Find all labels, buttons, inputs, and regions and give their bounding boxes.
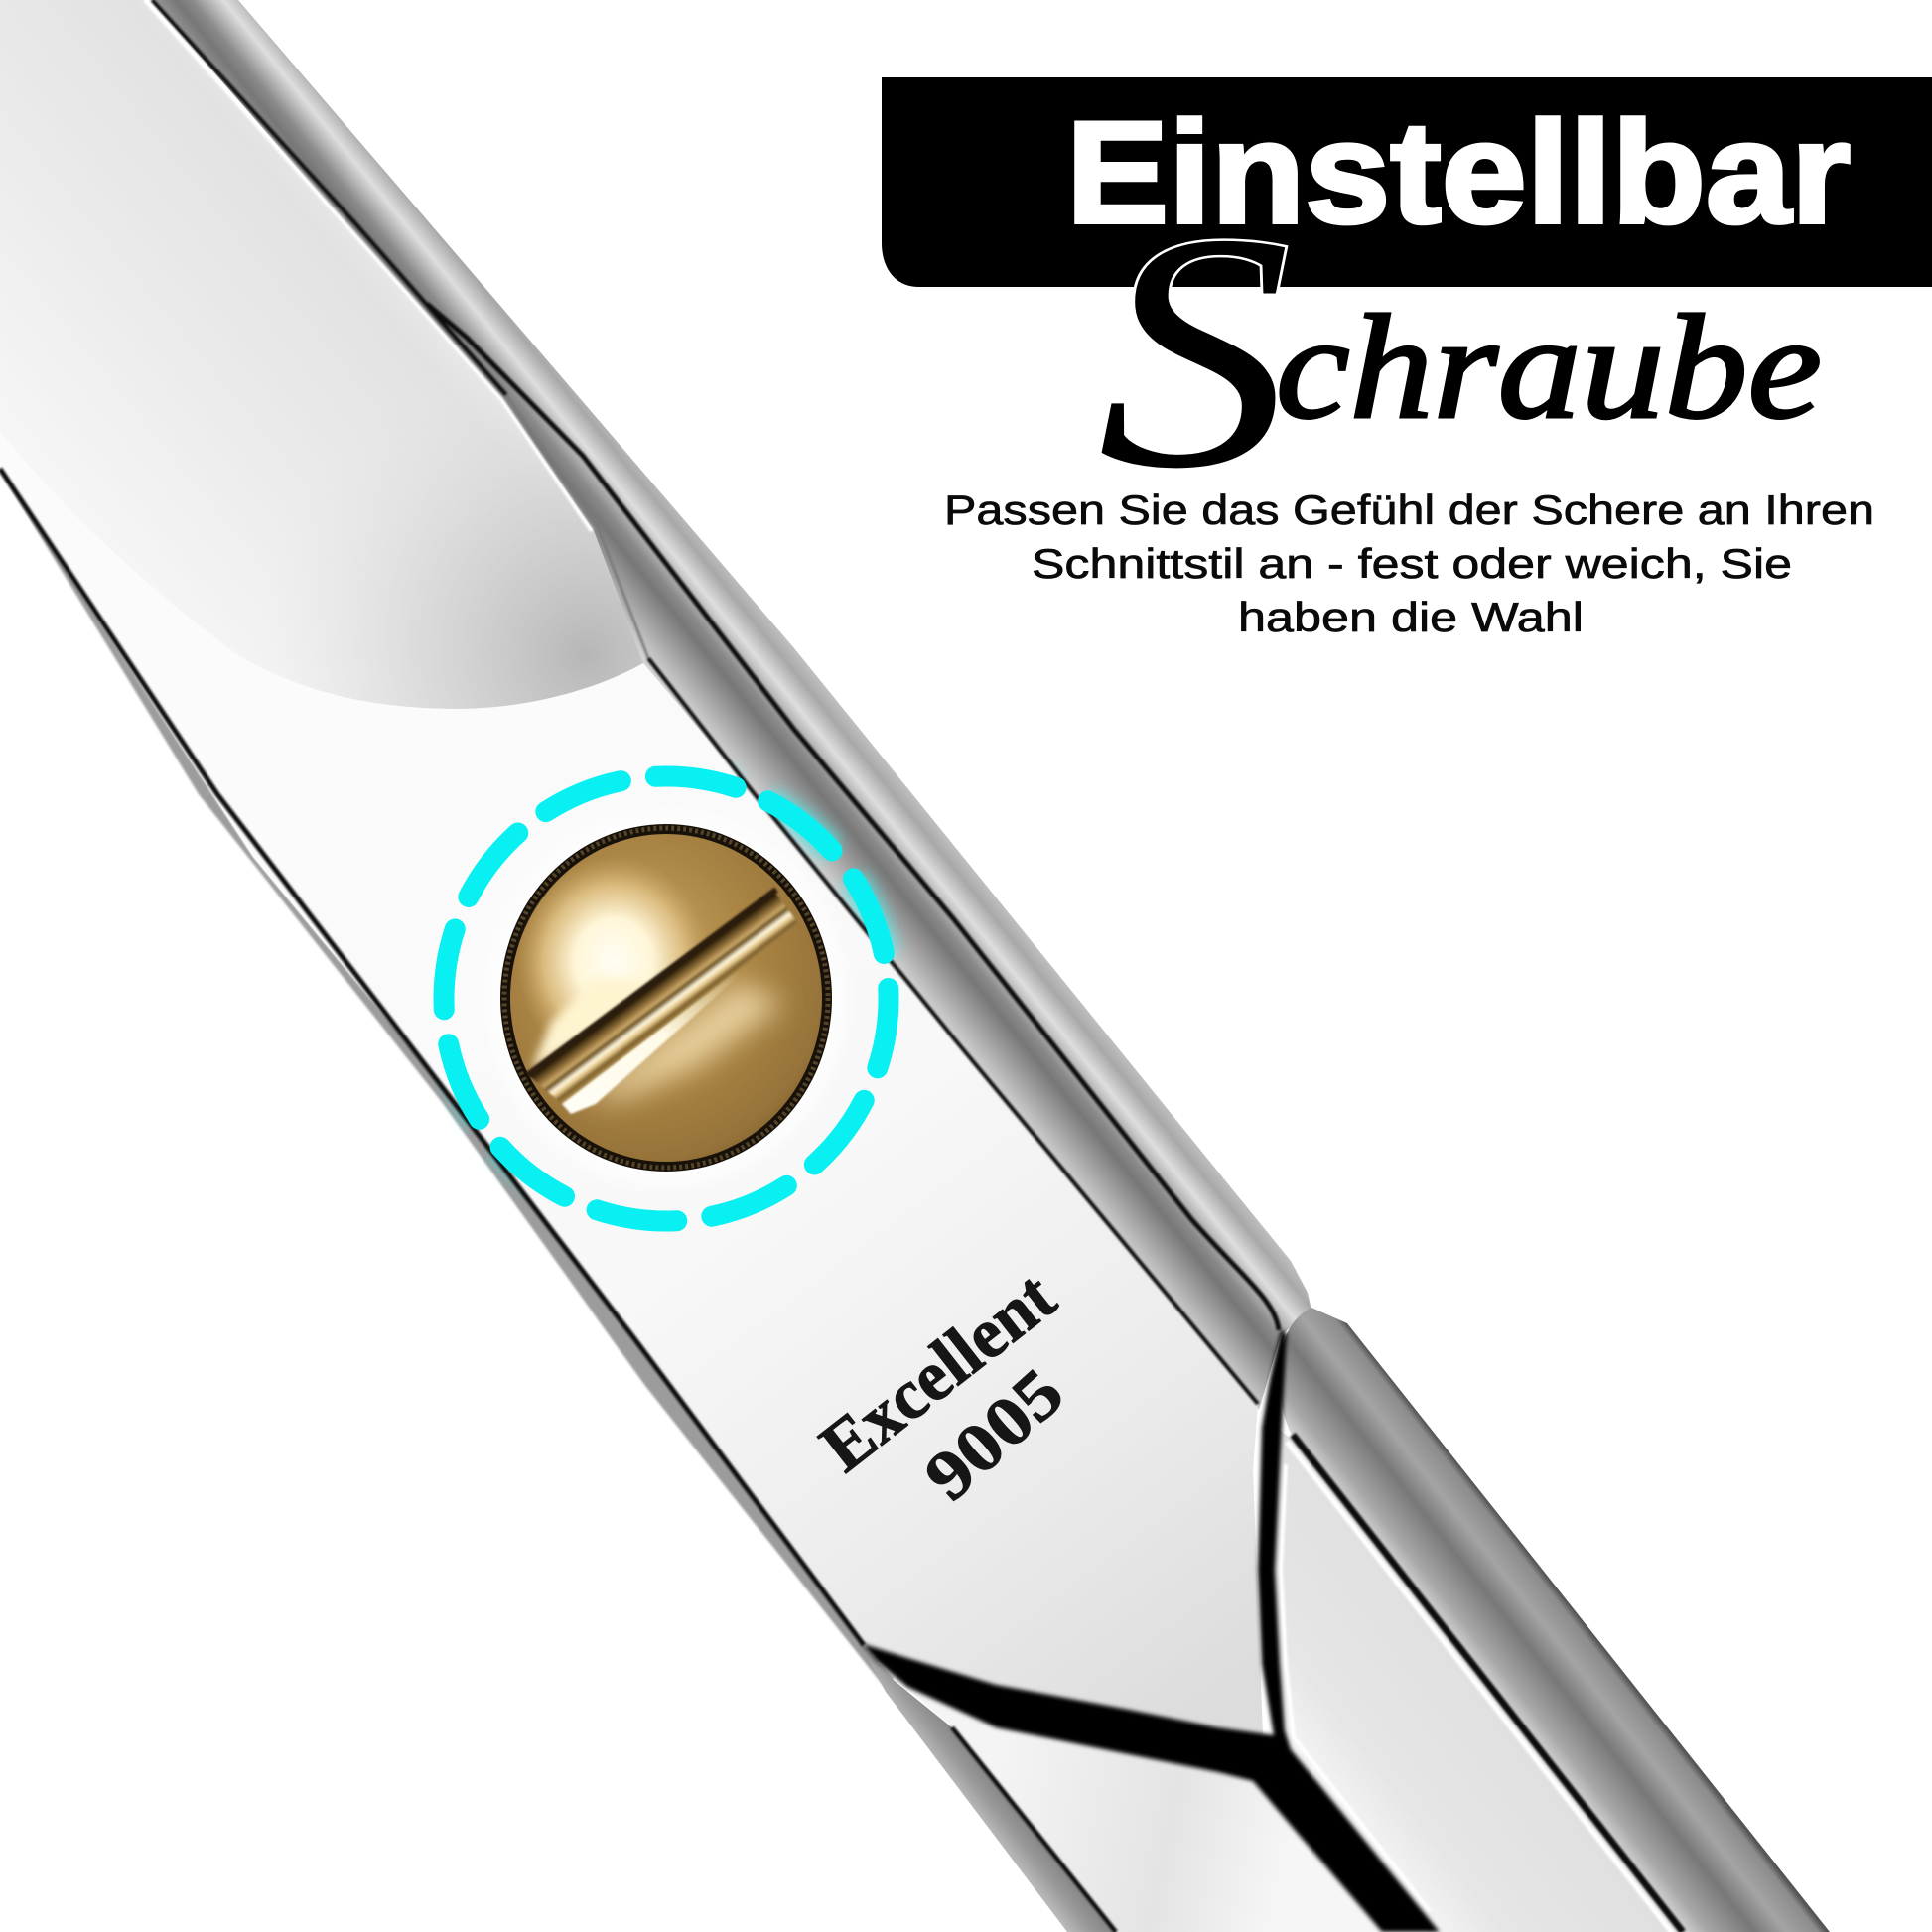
blade hollow shading bbox=[0, 0, 643, 709]
dashed cyan highlight ring bbox=[444, 776, 889, 1221]
script capital S: S bbox=[1097, 165, 1292, 538]
screw head bbox=[510, 834, 822, 1162]
description line 3: haben die Wahl bbox=[1238, 594, 1584, 640]
blade flat surface bbox=[0, 0, 643, 709]
screw outer ring bbox=[500, 824, 832, 1172]
lower left steel strip bbox=[0, 471, 894, 1690]
white edge highlights bbox=[145, 0, 1677, 1932]
lower right steel band bbox=[1279, 1308, 1830, 1932]
screw white halo bbox=[485, 809, 847, 1186]
bottom left steel strip bbox=[869, 1660, 1122, 1932]
script heading: Schraube bbox=[1097, 165, 1822, 538]
engraved model text bbox=[806, 1256, 1078, 1516]
upper bright reflection bbox=[520, 863, 700, 1026]
upper wedge highlight bbox=[527, 977, 639, 1069]
slot bbox=[528, 891, 798, 1105]
gold screw bbox=[500, 824, 832, 1172]
title banner: black bar bbox=[882, 77, 1932, 287]
dark Y seam bbox=[861, 1330, 1440, 1932]
slot top shadow bbox=[526, 890, 776, 1076]
upper steel band bbox=[152, 0, 1311, 1410]
ring glow over steel bbox=[444, 776, 889, 1221]
engraving: 9005: 9005 bbox=[910, 1354, 1078, 1516]
slot lower white edge bbox=[562, 969, 740, 1114]
bottom flat panel bbox=[877, 1661, 1382, 1932]
script letters chraube: chraube bbox=[1276, 285, 1822, 450]
screw highlights and slot bbox=[516, 856, 798, 1114]
heading: Einstellbar: Einstellbar bbox=[1066, 91, 1851, 253]
pivot flat surface bbox=[0, 431, 1263, 1735]
description line 2: Schnittstil an - fest oder weich, Sie bbox=[1032, 540, 1792, 587]
lower right flat panel bbox=[1272, 1430, 1683, 1932]
description line 1: Passen Sie das Gefühl der Schere an Ihren bbox=[944, 486, 1874, 533]
engraving: Excellent: Excellent bbox=[806, 1256, 1070, 1487]
description text bbox=[944, 486, 1874, 640]
screw ribbing bbox=[504, 828, 828, 1168]
lower wedge glow bbox=[586, 983, 784, 1100]
